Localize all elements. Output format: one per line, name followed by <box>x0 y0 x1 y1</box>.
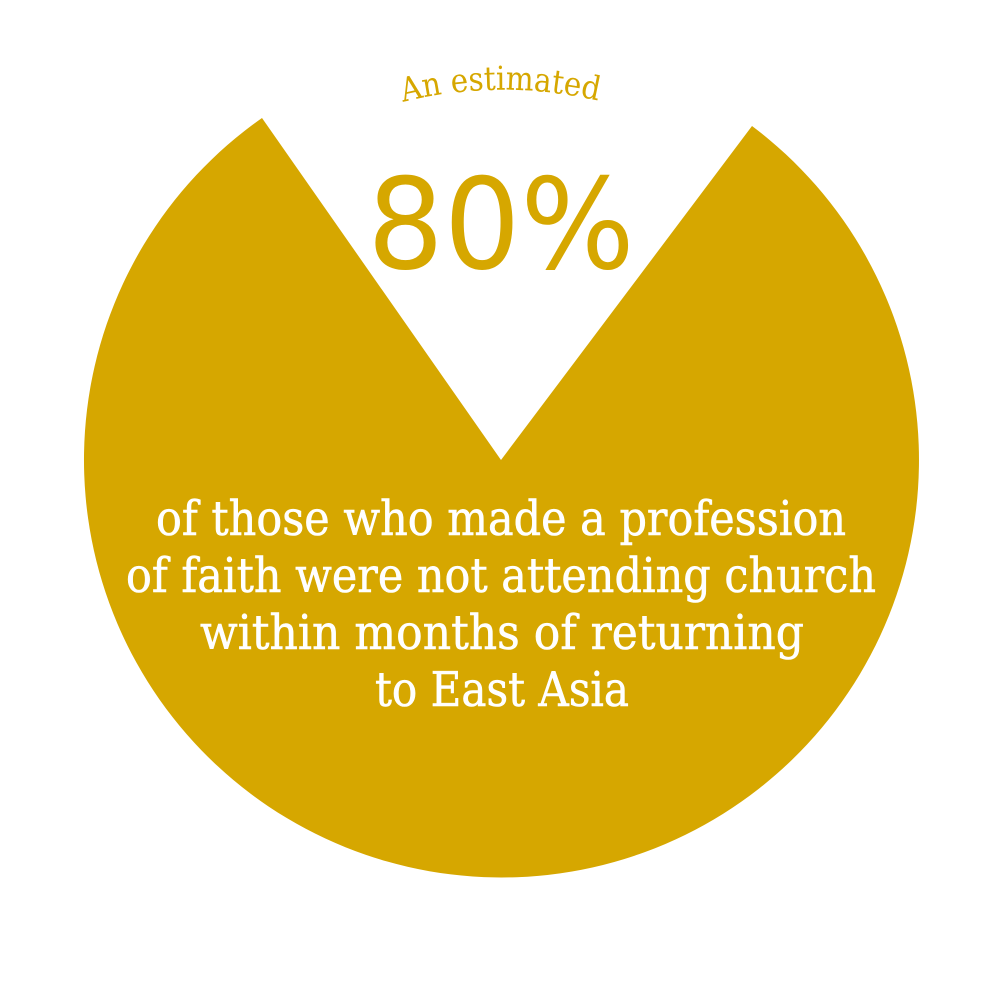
description text: within months of returning <box>200 605 804 661</box>
description text: of those who made a profession <box>156 491 846 547</box>
description text <box>126 491 876 718</box>
big number: 80%: 80% <box>367 152 635 299</box>
description text: of faith were not attending church <box>126 548 876 604</box>
pie chart: 80 percent slice <box>84 118 919 877</box>
curved label: An estimated: An estimated <box>402 66 600 102</box>
description text: to East Asia <box>375 662 629 718</box>
curved label: An estimated <box>402 66 600 102</box>
